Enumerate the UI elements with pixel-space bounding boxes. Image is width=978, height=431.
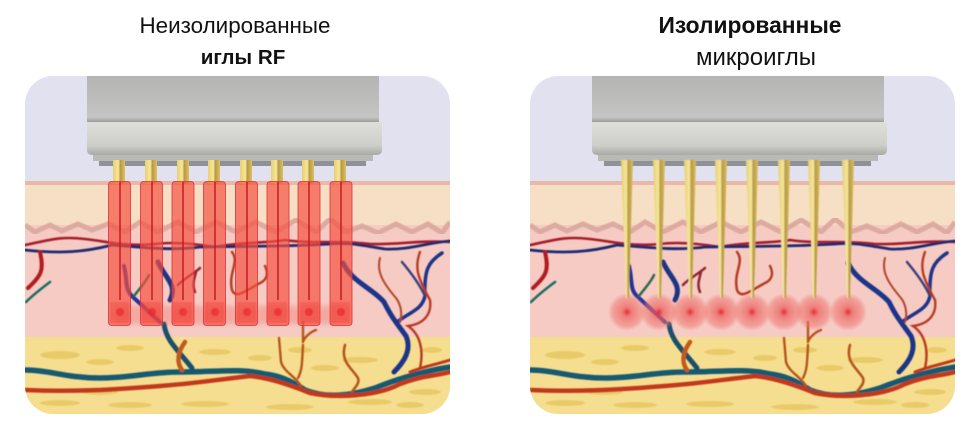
hot spots bbox=[110, 302, 350, 323]
heat spots bbox=[608, 293, 867, 331]
needles bbox=[113, 160, 346, 184]
tapered insulated needles bbox=[621, 160, 854, 298]
panel: non-insulated RF needles bbox=[25, 76, 450, 417]
title: left panel heading: иглы RF bbox=[201, 46, 285, 69]
title: right panel heading bbox=[659, 12, 841, 71]
title: left panel heading bbox=[140, 13, 330, 69]
panel: insulated microneedles bbox=[530, 76, 955, 417]
needle shafts inside columns bbox=[120, 182, 341, 300]
skin cross-section with vessels bbox=[530, 76, 955, 417]
title: left panel heading: Неизолированные bbox=[140, 13, 330, 38]
title: right panel heading: микроиглы bbox=[696, 44, 816, 71]
title: right panel heading: Изолированные bbox=[659, 12, 841, 38]
skin cross-section with vessels bbox=[25, 76, 450, 417]
device head bbox=[592, 76, 887, 166]
red RF heating columns bbox=[108, 182, 352, 326]
heat band bbox=[115, 306, 350, 324]
device head bbox=[87, 76, 382, 166]
